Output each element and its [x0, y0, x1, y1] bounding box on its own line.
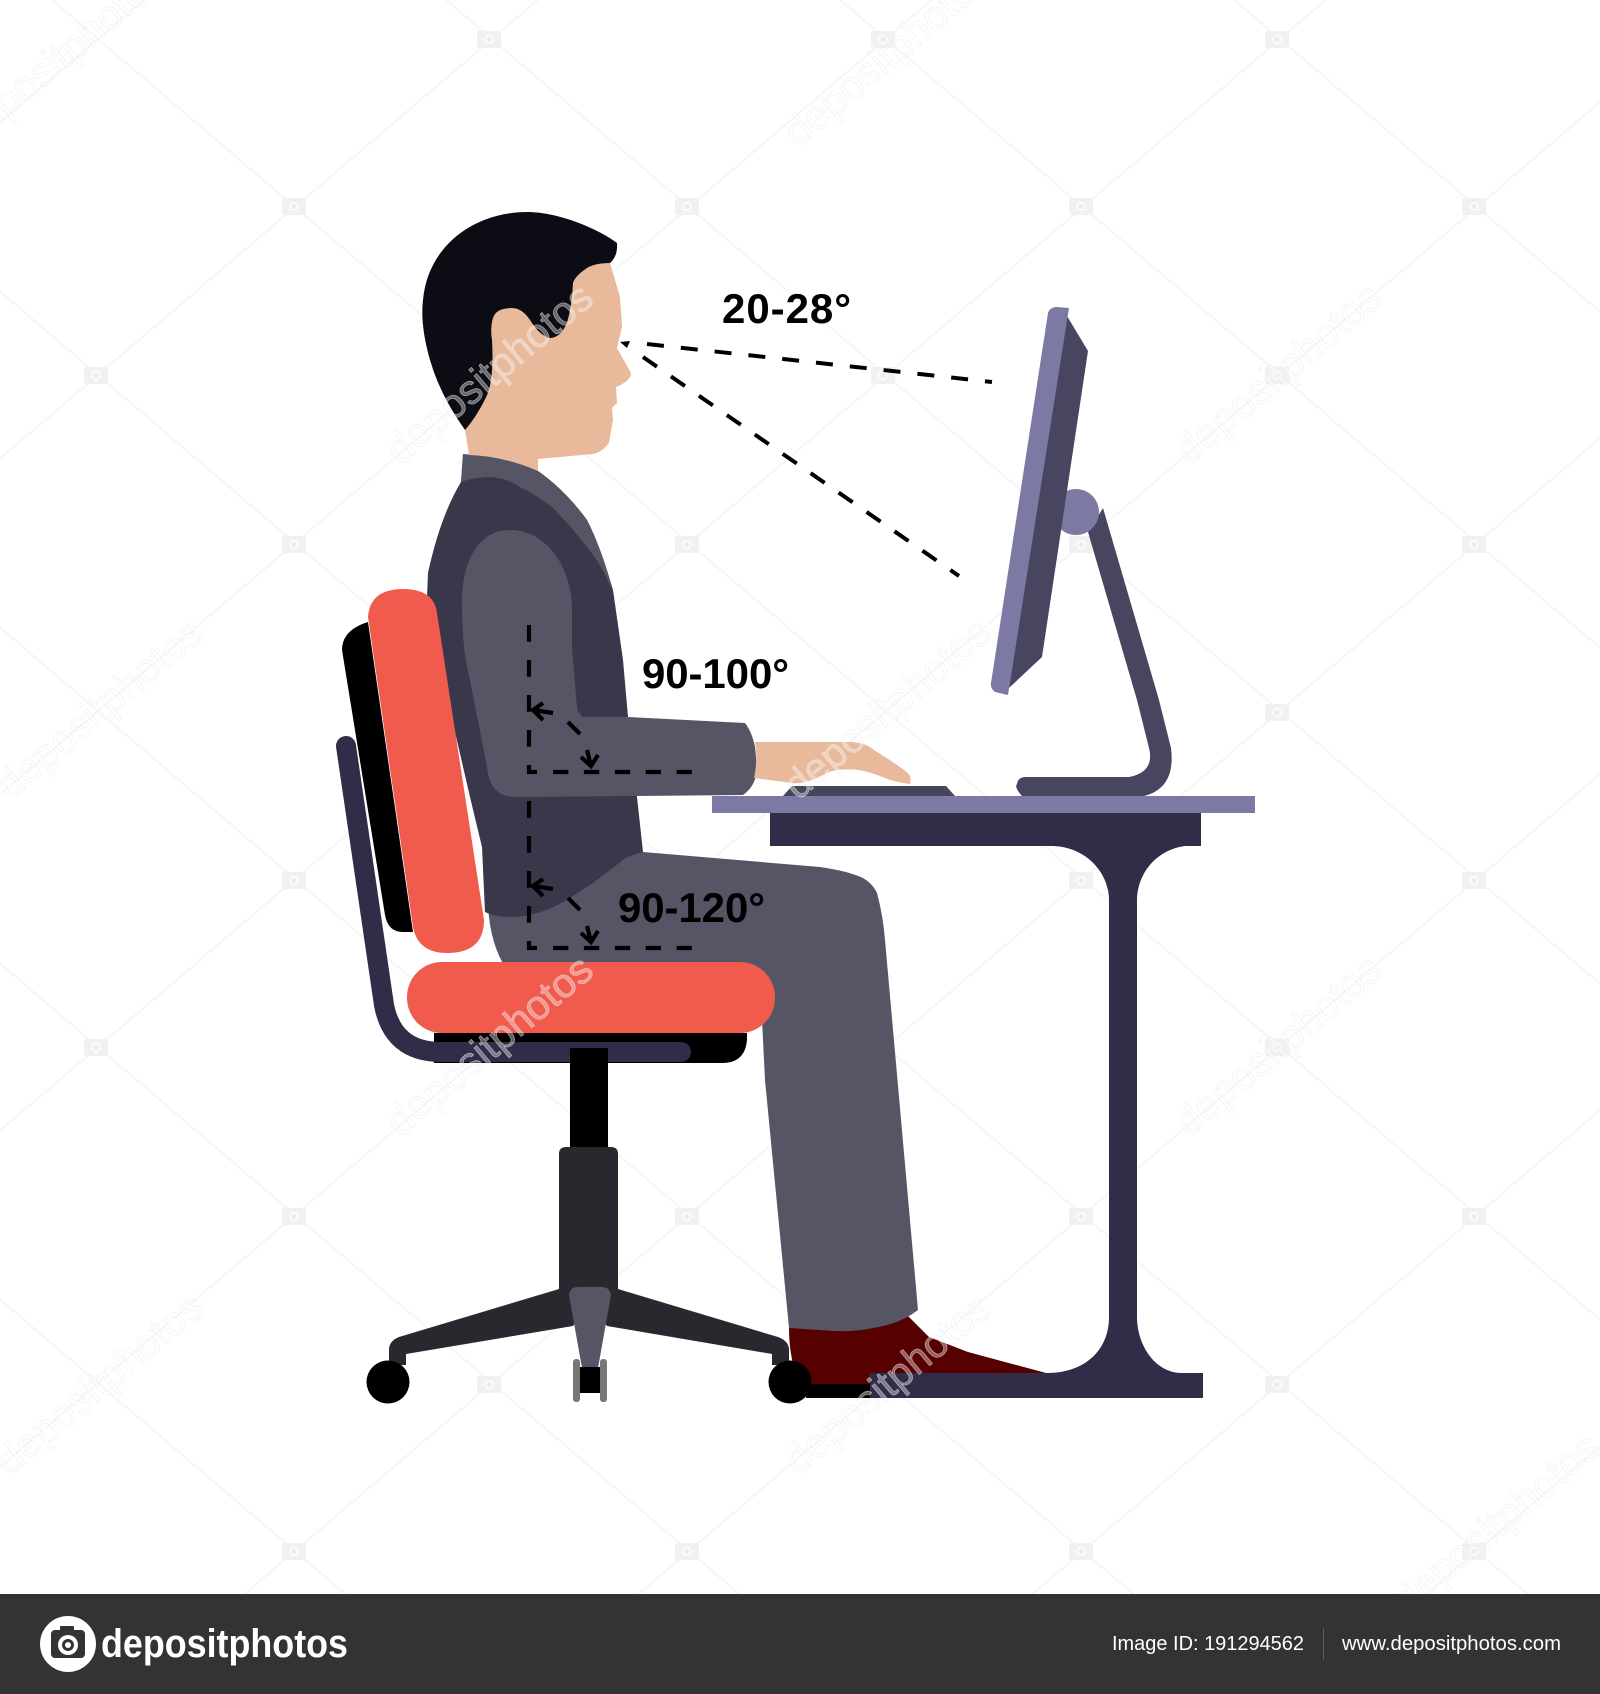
footer logo text: depositphotos — [101, 1622, 348, 1666]
watermark camera icons — [84, 31, 1486, 1560]
watermark text: depositphotos — [774, 1284, 1000, 1483]
chair — [342, 622, 789, 1404]
desk top — [712, 796, 1255, 813]
elbow angle marks — [527, 625, 692, 772]
label: elbow angle: 90-100° — [642, 650, 789, 697]
website address: www.depositphotos.com — [1341, 1632, 1561, 1655]
watermark text: depositphotos — [1165, 274, 1391, 473]
monitor hinge — [1053, 489, 1099, 535]
monitor back — [1009, 316, 1088, 688]
right caster — [768, 1360, 812, 1404]
chair rear frame — [346, 746, 681, 1052]
watermark text: depositphotos — [376, 274, 602, 473]
chair gas piston — [559, 1147, 618, 1295]
front caster — [573, 1359, 607, 1402]
chair base right spoke — [588, 1289, 789, 1365]
chair seat cushion — [407, 962, 775, 1033]
hip angle marks — [527, 801, 692, 948]
monitor — [991, 307, 1172, 796]
man — [422, 212, 1046, 1404]
chair back black pad — [342, 622, 413, 932]
keyboard — [783, 786, 955, 796]
monitor stand — [1016, 508, 1172, 796]
hand — [754, 742, 911, 784]
chair base centre spoke — [569, 1287, 611, 1368]
watermark text: depositphotos — [376, 946, 602, 1145]
footer logo icon — [40, 1616, 96, 1672]
black foot bar — [806, 1384, 870, 1398]
collar — [461, 454, 613, 592]
arm and sleeve — [462, 530, 757, 797]
watermark text: depositphotos — [774, 609, 1000, 808]
footer bar — [0, 1594, 1600, 1694]
left caster — [366, 1360, 410, 1404]
chair column — [570, 1048, 608, 1148]
chair seat underside — [434, 1033, 747, 1063]
watermark text: depositphotos — [1165, 946, 1391, 1145]
chair base left spoke — [389, 1289, 592, 1365]
hair — [422, 212, 617, 430]
image id: Image ID: 191294562 — [1112, 1632, 1304, 1655]
label: viewing angle: 20-28° — [722, 285, 851, 332]
neck and face — [465, 262, 631, 471]
desk — [712, 786, 1255, 1398]
label: hip angle: 90-120° — [618, 884, 765, 931]
torso — [427, 454, 643, 917]
sight lines — [620, 341, 992, 576]
desk apron and leg — [770, 813, 1203, 1398]
trousers — [488, 850, 918, 1331]
chair back cushion — [368, 589, 484, 953]
shoe — [789, 1315, 1046, 1384]
monitor front — [991, 307, 1069, 695]
